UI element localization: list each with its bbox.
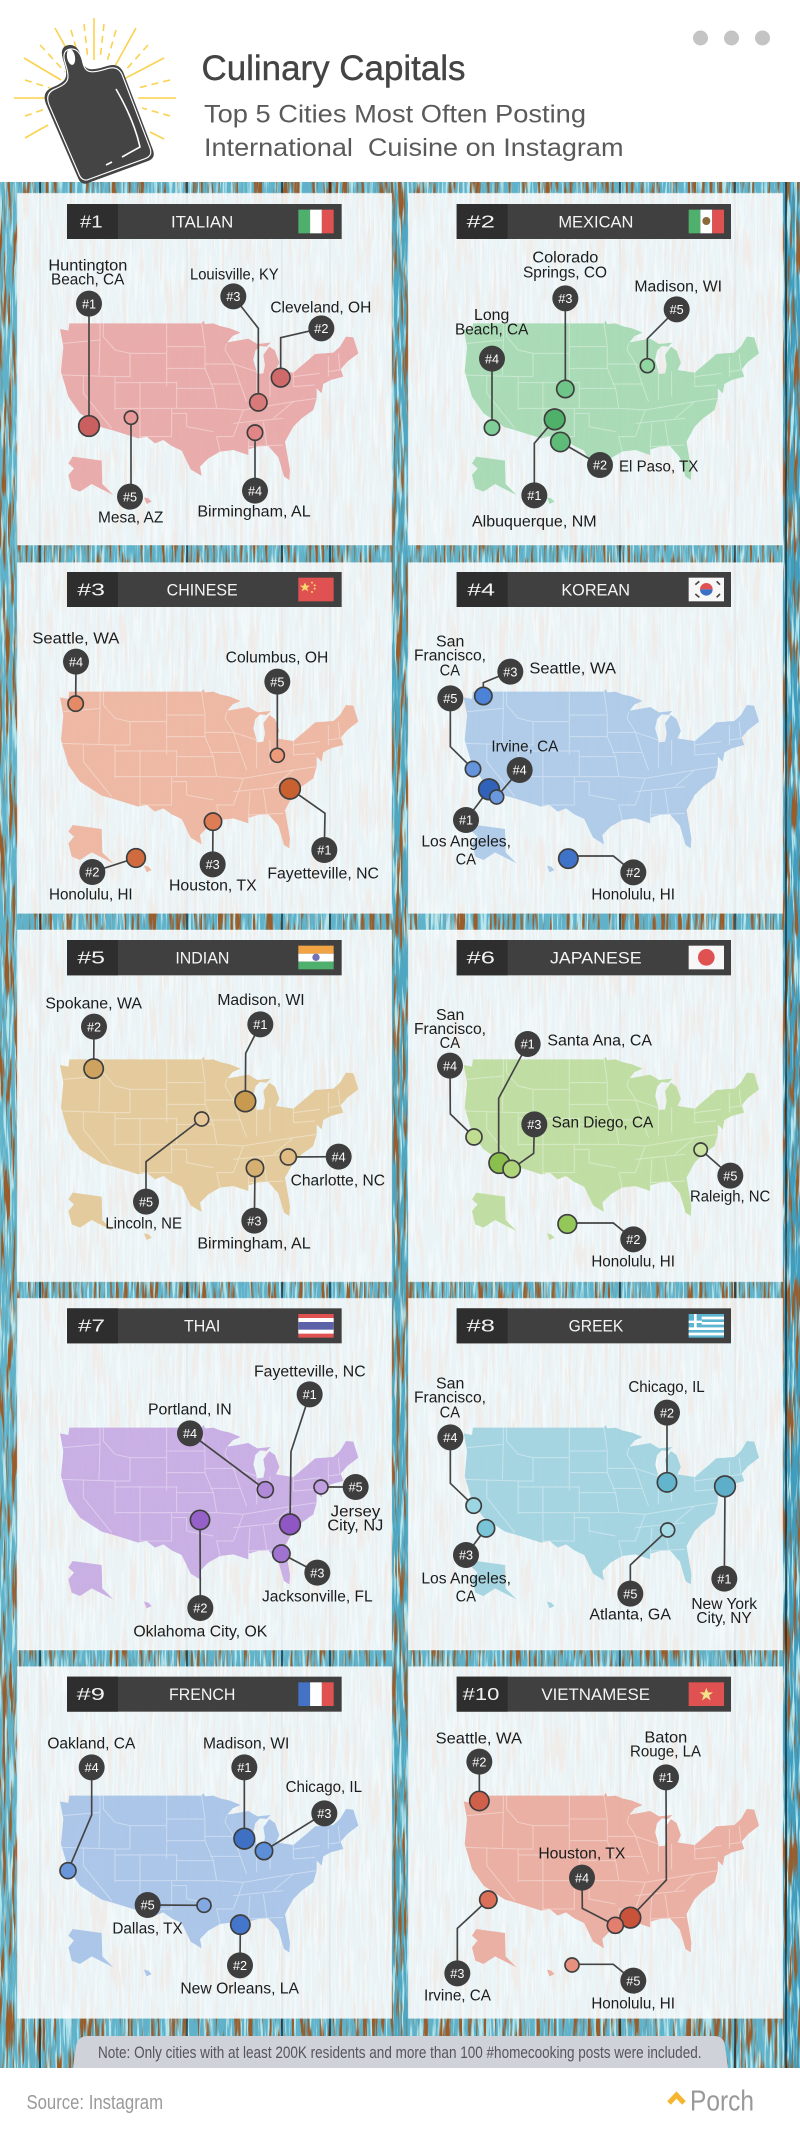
callout: Seattle	[475, 659, 617, 705]
header bar	[67, 204, 342, 239]
callout: Los Angeles: Los Angeles,	[421, 834, 511, 851]
callout: Seattle: Seattle, WA	[436, 1731, 523, 1748]
callout: Louisville: Louisville, KY	[190, 267, 279, 284]
subtitle	[204, 100, 624, 162]
header bar: #3	[77, 579, 105, 599]
callout: El Paso: El Paso, TX	[619, 459, 698, 476]
callout: Birmingham: Birmingham, AL	[197, 1235, 311, 1252]
panel: #7 Thai	[17, 1298, 392, 1650]
callout: Irvine: #4	[513, 764, 527, 778]
callout: Huntington Beach: Beach, CA	[51, 272, 125, 289]
callout: Honolulu: #2	[626, 1233, 640, 1247]
callout: Chicago: #2	[660, 1406, 674, 1420]
callout: New Orleans: New Orleans, LA	[180, 1981, 300, 1998]
callout: Birmingham: Birmingham, AL	[197, 504, 311, 521]
map	[60, 1793, 358, 1976]
callout: Jacksonville: Jacksonville, FL	[262, 1589, 373, 1606]
flag: France	[298, 1682, 334, 1706]
callout: Colorado Springs: Springs, CO	[523, 264, 607, 281]
callout: Chicago	[628, 1379, 705, 1492]
header bar: GREEK	[569, 1317, 623, 1336]
map	[464, 1057, 759, 1240]
callout: San Francisco: #4	[443, 1059, 457, 1073]
panel: #5 Indian	[17, 930, 392, 1282]
callout: Oakland: Oakland, CA	[47, 1736, 136, 1753]
callout: Dallas: #5	[141, 1899, 155, 1913]
header bar: #8	[467, 1316, 495, 1336]
callout: Honolulu: #2	[85, 866, 99, 880]
callout: Cleveland: Cleveland, OH	[270, 299, 371, 316]
callout: Albuquerque: #1	[527, 489, 541, 503]
callout: New York City	[691, 1476, 757, 1627]
callout: San Francisco	[414, 1376, 486, 1513]
panel: #8 Greek	[408, 1298, 783, 1650]
callout: San Francisco: CA	[440, 662, 461, 679]
callout: Chicago: Chicago, IL	[286, 1779, 362, 1796]
callout: Madison: Madison, WI	[203, 1736, 289, 1753]
callout: Honolulu: #5	[626, 1974, 640, 1988]
panel: #4 Korean	[408, 563, 783, 913]
callout: Los Angeles: CA	[456, 1589, 477, 1606]
flag: Japan	[689, 946, 724, 969]
callout: Madison: Madison, WI	[217, 992, 305, 1009]
callout: San Diego: San Diego, CA	[552, 1114, 654, 1131]
callout: Mesa	[98, 411, 163, 526]
callout: Oklahoma City: Oklahoma City, OK	[133, 1624, 268, 1641]
callout: Houston	[538, 1846, 625, 1933]
header bar	[457, 1308, 731, 1343]
callout: San Francisco: Francisco,	[414, 1021, 486, 1038]
callout: Honolulu: Honolulu, HI	[591, 1995, 675, 2012]
callout: San Francisco: Francisco,	[414, 648, 486, 665]
callout: Cleveland: #2	[314, 322, 328, 336]
flag: Thailand	[298, 1314, 334, 1338]
callout: Raleigh: Raleigh, NC	[690, 1189, 770, 1206]
header bar: FRENCH	[169, 1685, 235, 1704]
callout: Mesa: Mesa, AZ	[98, 509, 163, 526]
callout: Houston: Houston, TX	[169, 878, 257, 895]
callout: San Francisco: Francisco,	[414, 1390, 486, 1407]
callout: Los Angeles: #3	[459, 1549, 473, 1563]
map	[60, 321, 358, 504]
flag: Greece	[689, 1314, 724, 1338]
header bar: THAI	[184, 1317, 220, 1336]
subtitle: International Cuisine on Instagram	[204, 134, 624, 162]
header bar	[67, 940, 342, 975]
callout: Oakland	[47, 1736, 136, 1879]
callout: Irvine: Irvine, CA	[424, 1988, 492, 2005]
header bar	[457, 940, 731, 975]
callout: Houston: Houston, TX	[538, 1846, 625, 1863]
flag: China	[298, 578, 334, 601]
header bar	[457, 1677, 731, 1712]
callout: Honolulu: #2	[626, 866, 640, 880]
callout: Long Beach: Long	[474, 307, 509, 324]
callout: San Diego: #3	[527, 1118, 541, 1132]
callout: San Francisco: #4	[443, 1431, 457, 1445]
callout: Fayetteville: #1	[303, 1388, 317, 1402]
header bar: ITALIAN	[171, 212, 233, 231]
header bar: CHINESE	[167, 580, 238, 599]
callout: Charlotte	[280, 1144, 385, 1189]
flag: Italy	[298, 210, 334, 233]
header bar: #2	[467, 211, 495, 231]
callout: Honolulu	[558, 1215, 675, 1271]
callout: Seattle: Seattle, WA	[529, 660, 617, 677]
callout: Honolulu	[565, 1958, 675, 2012]
header bar: MEXICAN	[558, 212, 633, 231]
callout: Chicago: #3	[317, 1807, 331, 1821]
map	[464, 689, 759, 872]
logo: Porch: Porch	[690, 2086, 754, 2118]
callout: Atlanta	[589, 1523, 675, 1624]
flag: Mexico	[689, 210, 724, 233]
callout: Huntington Beach: Huntington	[48, 258, 127, 275]
callout: Honolulu	[559, 849, 675, 904]
callout: Portland: #4	[183, 1427, 197, 1441]
panel: #2 Mexican	[408, 193, 783, 545]
callout: Louisville	[190, 267, 279, 411]
callout: Colorado Springs	[523, 250, 607, 398]
callout: Seattle: #3	[503, 665, 517, 679]
callout: Columbus: Columbus, OH	[226, 649, 328, 666]
callout: Raleigh	[690, 1143, 770, 1206]
callout: Madison: Madison, WI	[634, 279, 722, 296]
callout: Santa Ana: Santa Ana, CA	[547, 1033, 653, 1050]
callout: Honolulu: Honolulu, HI	[49, 887, 133, 904]
callout: Irvine	[490, 739, 559, 804]
header bar	[67, 572, 342, 607]
header bar	[457, 204, 731, 239]
header bar: INDIAN	[175, 948, 229, 967]
callout: Long Beach: #4	[485, 352, 499, 366]
callout: Honolulu: Honolulu, HI	[591, 1254, 675, 1271]
callout: Jersey City: Jersey	[331, 1504, 381, 1521]
callout: El Paso	[551, 432, 698, 478]
callout: Honolulu	[49, 849, 145, 904]
callout: Portland: Portland, IN	[148, 1401, 232, 1418]
callout: Dallas: Dallas, TX	[112, 1921, 183, 1938]
map	[60, 1057, 358, 1240]
callout: Seattle: Seattle, WA	[32, 630, 120, 647]
callout: Oklahoma City: #2	[193, 1602, 207, 1616]
map	[60, 1425, 358, 1608]
callout: Oklahoma City	[133, 1510, 268, 1641]
callout: Birmingham	[197, 425, 311, 521]
callout: Birmingham: #3	[247, 1214, 261, 1228]
header bar	[67, 1677, 342, 1712]
callout: Fayetteville	[254, 1363, 366, 1535]
header bar: KOREAN	[561, 580, 630, 599]
panel: #9 French	[17, 1667, 392, 2018]
header bar: #7	[78, 1316, 105, 1336]
panel: #1 Italian	[17, 193, 392, 545]
subtitle: Top 5 Cities Most Often Posting	[204, 100, 586, 128]
callout: San Francisco: San	[436, 1007, 464, 1024]
callout: Spokane: Spokane, WA	[45, 996, 143, 1013]
callout: Jacksonville	[262, 1545, 373, 1606]
callout: Atlanta: #5	[623, 1587, 637, 1601]
callout: New York City: New York	[691, 1596, 757, 1613]
callout: Santa Ana: #1	[521, 1038, 535, 1052]
callout: Los Angeles	[421, 1520, 511, 1606]
callout: Madison: #1	[253, 1018, 267, 1032]
callout: Long Beach: Beach, CA	[455, 322, 529, 339]
logo: Porch	[669, 2086, 754, 2118]
callout: Oakland: #4	[85, 1761, 99, 1775]
callout: Houston: #3	[206, 858, 220, 872]
callout: San Francisco: San	[436, 1376, 464, 1393]
callout: Baton Rouge: #1	[659, 1771, 673, 1785]
callout: Baton Rouge	[620, 1730, 702, 1928]
header bar: #10	[463, 1684, 499, 1704]
callout: Chicago	[255, 1779, 362, 1860]
panel: #3 Chinese	[17, 563, 392, 913]
header bar	[67, 1308, 342, 1343]
callout: Columbus	[226, 649, 328, 762]
callout: Columbus: #5	[270, 675, 284, 689]
callout: Houston: #4	[575, 1871, 589, 1885]
callout: New Orleans	[180, 1915, 300, 1998]
callout: Irvine: #3	[450, 1967, 464, 1981]
flag: India	[298, 946, 334, 969]
callout: Jersey City: City, NJ	[327, 1518, 383, 1535]
callout: Irvine: Irvine, CA	[491, 739, 559, 756]
callout: San Francisco: San	[436, 634, 464, 651]
callout: Jacksonville: #3	[310, 1566, 324, 1580]
callout: Albuquerque	[472, 409, 597, 531]
map	[464, 1425, 759, 1608]
callout: Fayetteville: #1	[317, 844, 331, 858]
callout: San Francisco	[414, 1007, 486, 1145]
callout: New York City: City, NY	[696, 1610, 752, 1627]
panel: #10 Vietnamese	[408, 1667, 783, 2018]
callout: Los Angeles: CA	[456, 851, 477, 868]
header bar: #4	[467, 579, 495, 599]
callout: Lincoln: #5	[139, 1195, 153, 1209]
callout: Madison: #1	[237, 1761, 251, 1775]
callout: New Orleans: #2	[233, 1959, 247, 1973]
header bar: JAPANESE	[550, 948, 642, 967]
callout: Cleveland	[270, 299, 371, 387]
callout: Raleigh: #5	[723, 1169, 737, 1183]
map	[464, 1793, 759, 1976]
panel: #6 Japanese	[408, 930, 783, 1282]
callout: Albuquerque: Albuquerque, NM	[472, 514, 597, 531]
callout: Seattle	[32, 630, 120, 711]
callout: Baton Rouge: Rouge, LA	[630, 1744, 702, 1761]
callout: Seattle: #2	[472, 1755, 486, 1769]
callout: Madison: #5	[670, 303, 684, 317]
title: Culinary Capitals	[202, 49, 466, 88]
source: Source: Instagram	[26, 2092, 163, 2114]
callout: Colorado Springs: Colorado	[532, 250, 598, 267]
callout: Birmingham	[197, 1159, 311, 1252]
callout: Madison	[217, 992, 305, 1112]
callout: Los Angeles	[421, 779, 511, 868]
menu dots	[693, 30, 770, 46]
callout: Seattle	[436, 1731, 523, 1811]
flag: South Korea	[689, 578, 724, 601]
map	[464, 321, 759, 504]
callout: San Francisco: CA	[440, 1035, 461, 1052]
callout: San Diego	[503, 1111, 654, 1178]
callout: Charlotte: #4	[332, 1150, 346, 1164]
callout: San Francisco: #5	[443, 692, 457, 706]
callout: Fayetteville	[267, 778, 379, 882]
callout: Huntington Beach	[48, 258, 127, 436]
callout: Santa Ana	[489, 1031, 653, 1173]
callout: Lincoln	[105, 1112, 209, 1233]
callout: Mesa: #5	[123, 490, 137, 504]
callout: Madison	[203, 1736, 289, 1849]
callout: Huntington Beach: #1	[82, 297, 96, 311]
callout: Birmingham: #4	[248, 484, 262, 498]
header bar	[457, 572, 731, 607]
header bar: #9	[77, 1684, 105, 1704]
callout: Baton Rouge: Baton	[644, 1730, 687, 1747]
callout: Atlanta: Atlanta, GA	[589, 1607, 672, 1624]
header bar: #6	[467, 947, 495, 967]
callout: Fayetteville: Fayetteville, NC	[267, 865, 379, 882]
callout: Lincoln: Lincoln, NE	[105, 1216, 182, 1233]
callout: Honolulu: Honolulu, HI	[591, 887, 675, 904]
callout: Louisville: #3	[226, 290, 240, 304]
callout: Houston	[169, 813, 257, 895]
callout: Spokane	[45, 996, 143, 1078]
callout: Dallas	[112, 1892, 211, 1938]
callout: Jersey City	[314, 1474, 383, 1535]
callout: Fayetteville: Fayetteville, NC	[254, 1363, 366, 1380]
callout: El Paso: #2	[593, 459, 607, 473]
callout: Charlotte: Charlotte, NC	[291, 1172, 385, 1189]
callout: Madison	[634, 279, 722, 373]
callout: New York City: #1	[717, 1572, 731, 1586]
callout: San Francisco	[414, 634, 486, 777]
callout: Seattle: #4	[69, 655, 83, 669]
callout: Spokane: #2	[87, 1020, 101, 1034]
header bar: VIETNAMESE	[541, 1685, 650, 1704]
callout: Colorado Springs: #3	[558, 292, 572, 306]
callout: Los Angeles: #1	[459, 814, 473, 828]
note bar	[73, 2036, 728, 2068]
header bar: #1	[80, 211, 103, 231]
callout: Chicago: Chicago, IL	[628, 1379, 705, 1396]
callout: San Francisco: CA	[440, 1405, 461, 1422]
callout: Long Beach	[455, 307, 529, 435]
callout: Los Angeles: Los Angeles,	[421, 1571, 511, 1588]
flag: Vietnam	[689, 1682, 724, 1706]
callout: Jersey City: #5	[349, 1481, 363, 1495]
header: cutting board icon with sunburst	[14, 18, 176, 184]
header bar: #5	[77, 947, 105, 967]
callout: Irvine	[424, 1891, 497, 2005]
map	[60, 689, 358, 872]
callout: Portland	[148, 1401, 273, 1498]
